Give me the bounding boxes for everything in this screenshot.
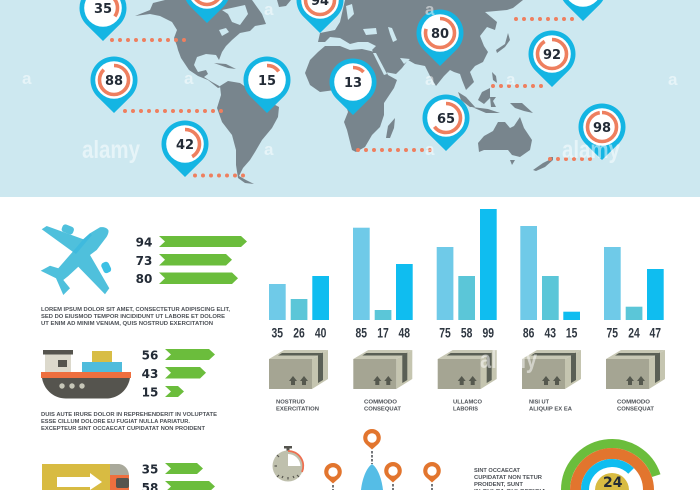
panel: world map [0, 0, 700, 197]
bar group 2: 48 [399, 324, 410, 340]
icon: stopwatch [272, 446, 304, 482]
map pin: 13 [330, 58, 376, 115]
map pin: 92 [528, 30, 576, 87]
dotted connector lines [112, 19, 592, 176]
map pin: 94 [296, 0, 344, 33]
map pin: 92: 92 [543, 48, 561, 63]
value: 80 [136, 272, 238, 286]
watermarks: a [668, 70, 678, 89]
bar group 2 [353, 228, 413, 340]
text block: sea freight description [41, 412, 217, 432]
map pin: 98 [578, 103, 626, 160]
bar group 5 [604, 247, 664, 340]
location pin: middle [384, 462, 402, 482]
watermarks: a [425, 70, 435, 89]
bar group 4: 43 [545, 324, 556, 340]
panel: air freight [41, 224, 247, 327]
text block: air freight description: UT ENIM AD MINIM VENIAM, QUIS NOSTRUD EXERCITATION [41, 321, 213, 327]
watermarks: alamy [480, 346, 537, 374]
watermarks: a [184, 69, 194, 88]
watermarks: a [264, 140, 274, 159]
label: box 4: NISI UT [529, 400, 550, 406]
watermarks: a [506, 70, 516, 89]
icon: box 1 [269, 350, 328, 389]
map pin: 35 [80, 0, 126, 41]
value: 35 [142, 462, 203, 476]
row: cargo boxes [269, 350, 665, 412]
bar group 3: 99 [483, 324, 494, 340]
location pin: left [324, 463, 342, 484]
value: 56 [142, 348, 215, 362]
map pin: 15 [244, 56, 290, 113]
label: box 3: LABORIS [453, 406, 478, 412]
label: box 4: ALIQUIP EX EA [529, 406, 572, 412]
label: box 1: NOSTRUD [276, 400, 305, 406]
text block: radial chart description: PROIDENT, SUNT [474, 482, 524, 488]
bar group 5: 24 [628, 324, 640, 340]
map pin: 35: 35 [94, 2, 112, 17]
icon: box 3 [438, 350, 497, 389]
value: 94 [136, 236, 247, 250]
label: box 2: COMMODO [364, 400, 398, 406]
label: box 1: EXERCITATION [276, 406, 319, 412]
bar group 3 [437, 209, 497, 340]
bar group 4: 86 [523, 324, 535, 340]
map pin: 98: 98 [593, 121, 611, 136]
location pin: right [423, 462, 441, 482]
text block: sea freight description: EXCEPTEUR SINT OCCAECAT CUPIDATAT NON PROIDENT [41, 426, 206, 432]
text block: air freight description [41, 307, 230, 327]
watermarks: alamy [562, 136, 620, 164]
value: 35: 35 [142, 462, 158, 476]
value: 56: 56 [142, 348, 158, 362]
icon: airplane [41, 224, 112, 295]
text block: sea freight description: DUIS AUTE IRURE DOLOR IN REPREHENDERIT IN VOLUPTATE [41, 412, 217, 418]
value: 43: 43 [142, 367, 158, 381]
text block: air freight description: LOREM IPSUM DOLOR SIT AMET, CONSECTETUR ADIPISCING ELIT, [41, 307, 230, 313]
map pin: 65 [422, 94, 470, 151]
label: box 5 [617, 400, 655, 412]
bar group 3: 75 [439, 324, 451, 340]
watermarks: a [264, 0, 274, 19]
land masses [135, 0, 553, 184]
value: 43 [142, 367, 206, 381]
label: box 3: ULLAMCO [453, 400, 483, 406]
text block: radial chart description: CUPIDATAT NON TETUR [474, 475, 542, 481]
label: box 3 [453, 400, 483, 412]
value: 80: 80 [136, 272, 152, 286]
inland seas and bays [219, 4, 410, 75]
bar group 4 [520, 226, 580, 340]
label: box 5: COMMODO [617, 400, 651, 406]
map pin: 65: 65 [437, 112, 455, 127]
bar group 2: 17 [377, 324, 389, 340]
map pin: 88: 88 [105, 74, 123, 89]
watermarks [22, 0, 678, 374]
watermarks: a [425, 140, 435, 159]
diagram: route pins and rocket [324, 429, 441, 490]
text block: sea freight description: ESSE CILLUM DOLORE EU FUGIAT NULLA PARIATUR. [41, 419, 190, 425]
map pin: top centre-left [184, 0, 230, 23]
bar group 3: 58 [461, 324, 473, 340]
value: 58 [142, 481, 215, 490]
map pin: 42 [162, 120, 208, 177]
icon: box 2 [353, 350, 412, 389]
text block: air freight description: SED DO EIUSMOD TEMPOR INCIDIDUNT UT LABORE ET DOLORE [41, 314, 225, 320]
value: 15: 15 [142, 386, 158, 400]
value: 73 [136, 254, 232, 268]
map pin: 80: 80 [431, 27, 449, 42]
label: box 2: CONSEQUAT [364, 406, 402, 412]
bar group 1: 35 [272, 324, 283, 340]
map pin: 15: 15 [258, 74, 276, 89]
label: box 4 [529, 400, 572, 412]
map pin: 88 [90, 56, 138, 113]
icon: truck [42, 464, 129, 490]
map pin: 42: 42 [176, 138, 194, 153]
panel: road freight [42, 462, 215, 490]
watermarks: a [22, 69, 32, 88]
watermarks: a [425, 0, 435, 19]
bar group 1 [269, 276, 329, 340]
value: 73: 73 [136, 254, 152, 268]
map pin: 80 [416, 9, 464, 66]
icon: box 5 [606, 350, 665, 389]
text block: radial chart description: SINT OCCAECAT [474, 468, 521, 474]
map pin: top right [560, 0, 606, 21]
radial chart [566, 444, 656, 490]
icon: box 4 [522, 350, 581, 389]
label: box 2 [364, 400, 402, 412]
dashed pin stems [333, 451, 432, 490]
map pin: 13: 13 [344, 76, 362, 91]
bar group 1: 26 [293, 324, 305, 340]
icon: cargo ship [41, 350, 131, 398]
value: 94: 94 [136, 236, 152, 250]
bar chart: shipments by group [269, 209, 664, 340]
label: box 1 [276, 400, 319, 412]
bar group 4: 15 [566, 324, 578, 340]
location pin: top [363, 429, 381, 450]
watermarks: alamy [82, 136, 140, 164]
label: box 5: CONSEQUAT [617, 406, 655, 412]
bar group 5: 47 [650, 324, 661, 340]
bar group 2: 85 [356, 324, 367, 340]
bar group 1: 40 [315, 324, 327, 340]
bar group 5: 75 [607, 324, 618, 340]
value: 15 [142, 386, 184, 400]
text block: radial chart description [474, 468, 546, 490]
panel: sea freight [41, 348, 217, 432]
rocket cone [361, 464, 383, 490]
